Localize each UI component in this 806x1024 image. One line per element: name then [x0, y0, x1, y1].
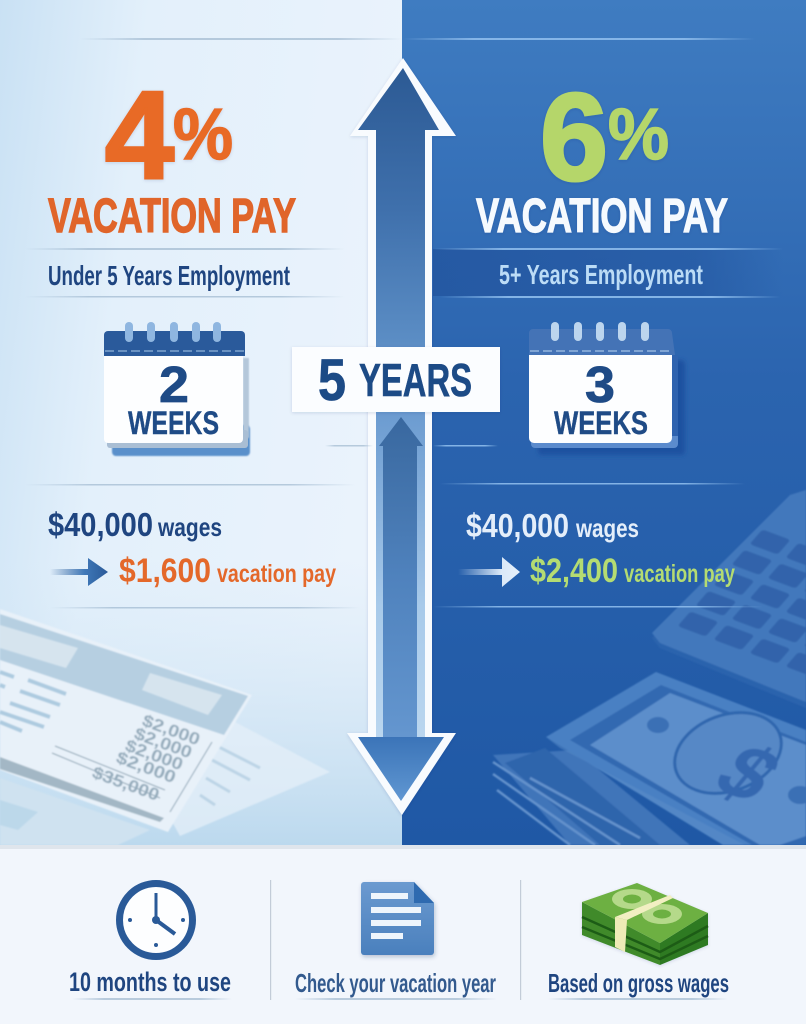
- label: 5 years: [292, 347, 500, 413]
- icon: document: [361, 882, 434, 955]
- illustration: pay stub: $2,000: [123, 736, 186, 774]
- rule: right top: [403, 38, 755, 40]
- calendar: 2 weeks: [104, 322, 250, 456]
- example: left wages: wages: [157, 512, 222, 542]
- label: 5 years: 5: [318, 348, 346, 413]
- heading: 6 percent: [540, 69, 669, 207]
- example: right vacation pay: vacation pay: [624, 560, 735, 588]
- illustration: cash stack: [493, 672, 806, 845]
- illustration: pay stub: [0, 609, 330, 845]
- illustration: pay stub: $2,000: [132, 724, 195, 762]
- band: right subtitle background: [433, 249, 783, 296]
- heading: left vacation pay: VACATION PAY: [48, 190, 296, 243]
- text: check your vacation year: Check your vacation year: [295, 968, 496, 998]
- illustration: pay stub: $2,000: [114, 748, 178, 787]
- example: left vacation pay: [119, 552, 336, 590]
- arrow: left result: [50, 558, 108, 586]
- illustration: calculator: [652, 490, 806, 708]
- illustration: cash stack: $: [697, 730, 798, 818]
- text: 10 months to use: 10 months to use: [69, 967, 231, 997]
- example: right vacation pay: [530, 552, 735, 590]
- example: right vacation pay: $2,400: [530, 552, 618, 590]
- example: right wages: [466, 507, 639, 544]
- example: left wages: $40,000: [48, 506, 153, 543]
- rule: centre fade: [325, 445, 498, 446]
- example: left vacation pay: $1,600: [119, 552, 211, 590]
- central double arrow: [347, 58, 456, 815]
- label: 5 years: YEARS: [359, 354, 472, 406]
- calendar: 3 weeks: WEEKS: [554, 405, 648, 441]
- example: left vacation pay: vacation pay: [217, 560, 336, 588]
- panel: footer: [0, 845, 806, 1024]
- calendar: 2 weeks: 2: [159, 356, 189, 413]
- underline: clock label: [72, 998, 232, 1000]
- arrow: right result: [458, 557, 520, 587]
- rule: left top: [80, 38, 402, 40]
- heading: 6 percent: %: [608, 95, 669, 175]
- calendar: 3 weeks: [529, 322, 685, 455]
- example: right wages: $40,000: [466, 507, 569, 544]
- illustration: pay stub: $2,000: [140, 711, 203, 749]
- illustration: pay stub: $35,000: [90, 763, 162, 805]
- panel: right background: [402, 0, 806, 845]
- heading: 4 percent: 4: [105, 67, 174, 205]
- example: right wages: wages: [575, 513, 639, 543]
- underline: document label: [295, 998, 497, 1000]
- rules: right section dividers: [433, 248, 783, 608]
- icon: money stack: [582, 883, 708, 965]
- calendar: 3 weeks: 3: [585, 356, 615, 413]
- underline: money label: [548, 998, 728, 1000]
- icon: clock: [120, 884, 192, 956]
- panel: left background: [0, 0, 403, 845]
- heading: 6 percent: 6: [540, 69, 608, 207]
- inner up arrow: [379, 417, 423, 737]
- heading: 4 percent: [105, 67, 233, 205]
- arrow lower head: [358, 737, 444, 801]
- heading: 4 percent: %: [173, 95, 233, 175]
- rules: left section dividers: [25, 248, 360, 608]
- example: left wages: [48, 506, 222, 543]
- subtitle: 5+ years: 5+ Years Employment: [499, 259, 703, 290]
- subtitle: under 5 years: Under 5 Years Employment: [48, 260, 290, 291]
- calendar: 2 weeks: WEEKS: [128, 405, 219, 441]
